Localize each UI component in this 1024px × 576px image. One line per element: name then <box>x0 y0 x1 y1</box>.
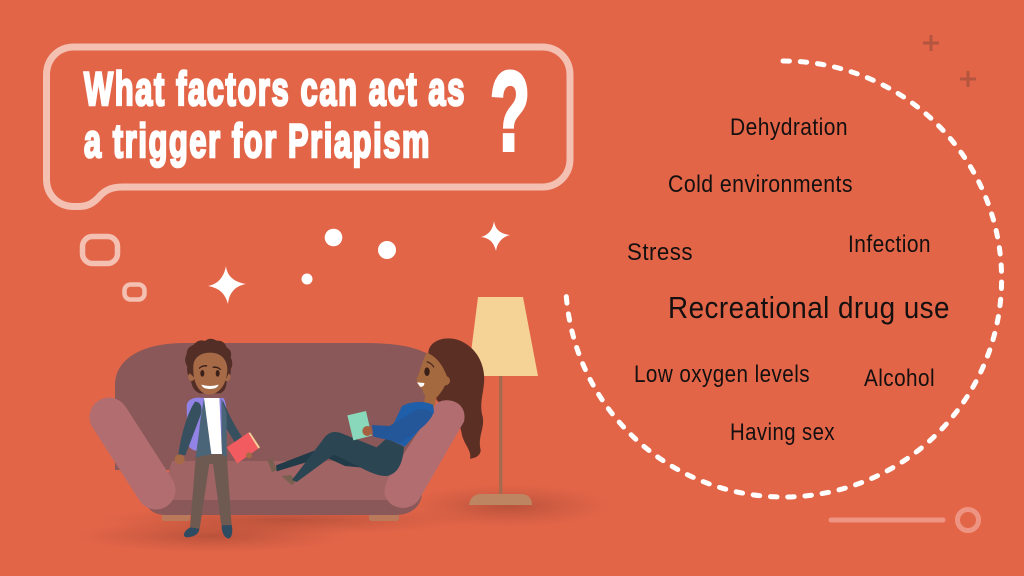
book pages <box>248 433 260 449</box>
trigger list <box>627 114 950 446</box>
trigger: cold environments: Cold environments <box>668 171 853 198</box>
dashed circle around trigger list <box>566 61 1002 497</box>
woman eyebrow <box>427 362 434 367</box>
woman smile <box>417 382 424 387</box>
speech bubble with title <box>46 47 570 206</box>
dot <box>378 241 396 259</box>
boy jacket <box>196 398 227 457</box>
boy red book <box>227 433 259 463</box>
boy right hand <box>246 452 252 458</box>
decorative ring <box>958 510 978 530</box>
trigger: stress: Stress <box>627 239 693 266</box>
sparkle small <box>481 221 510 251</box>
title text: What factors can act as <box>84 62 466 115</box>
thought bubbles and sparkles <box>82 221 510 304</box>
boy brows and eyes <box>199 365 221 377</box>
dot <box>325 229 342 246</box>
boy backpack <box>187 398 227 451</box>
sofa <box>109 343 432 521</box>
sofa seat <box>160 461 410 500</box>
boy smile <box>201 385 219 389</box>
sofa base <box>142 495 422 515</box>
boy standing with backpack and book <box>175 339 260 539</box>
woman ear <box>441 376 450 385</box>
woman neck <box>424 395 437 406</box>
boy ears <box>188 373 230 381</box>
shadow under lamp <box>403 484 613 528</box>
woman feet <box>267 459 296 485</box>
sofa legs <box>162 514 399 521</box>
boy shoes <box>184 525 232 539</box>
speech bubble outline <box>46 47 570 206</box>
shadow under boy <box>72 519 352 553</box>
woman back leg <box>276 445 370 471</box>
floor lamp <box>468 297 538 505</box>
decorative line and ring <box>831 510 978 530</box>
boy left hand <box>175 454 185 464</box>
question mark: ? <box>490 49 530 174</box>
sparkle large <box>208 266 246 304</box>
trigger: dehydration: Dehydration <box>730 114 848 141</box>
boy left arm <box>178 402 201 455</box>
ground shadows <box>72 484 613 553</box>
left armrest <box>109 417 156 490</box>
title text <box>84 62 466 167</box>
trigger: infection: Infection <box>848 231 931 258</box>
boy face <box>193 353 227 395</box>
woman reclining on sofa <box>267 338 484 508</box>
decorative plus signs <box>923 35 976 87</box>
woman front leg and hip <box>292 432 404 482</box>
lamp shade <box>468 297 538 376</box>
woman hair <box>428 338 484 459</box>
trigger: alcohol: Alcohol <box>864 365 935 392</box>
title text: a trigger for Priapism <box>84 114 431 167</box>
decorative line <box>831 518 943 522</box>
rounded thought shape large <box>82 236 118 264</box>
trigger: having sex: Having sex <box>730 419 835 446</box>
lamp pole <box>499 375 502 495</box>
woman eye <box>424 367 430 376</box>
shadow under sofa <box>95 505 475 535</box>
rounded thought shape small <box>124 284 144 300</box>
boy right arm <box>223 400 242 445</box>
right armrest <box>385 400 465 508</box>
woman sleeve <box>372 409 433 443</box>
boy shirt <box>204 398 222 454</box>
trigger: recreational drug use: Recreational drug use <box>668 290 950 325</box>
woman book <box>347 411 372 440</box>
boy trousers <box>190 454 232 529</box>
woman face <box>417 353 447 399</box>
lamp base <box>469 494 532 505</box>
dot <box>302 274 312 284</box>
woman sweater <box>387 402 434 447</box>
trigger: low oxygen levels: Low oxygen levels <box>634 361 810 388</box>
boy hair <box>185 339 232 393</box>
woman hand <box>362 426 372 436</box>
sofa back <box>115 343 432 470</box>
